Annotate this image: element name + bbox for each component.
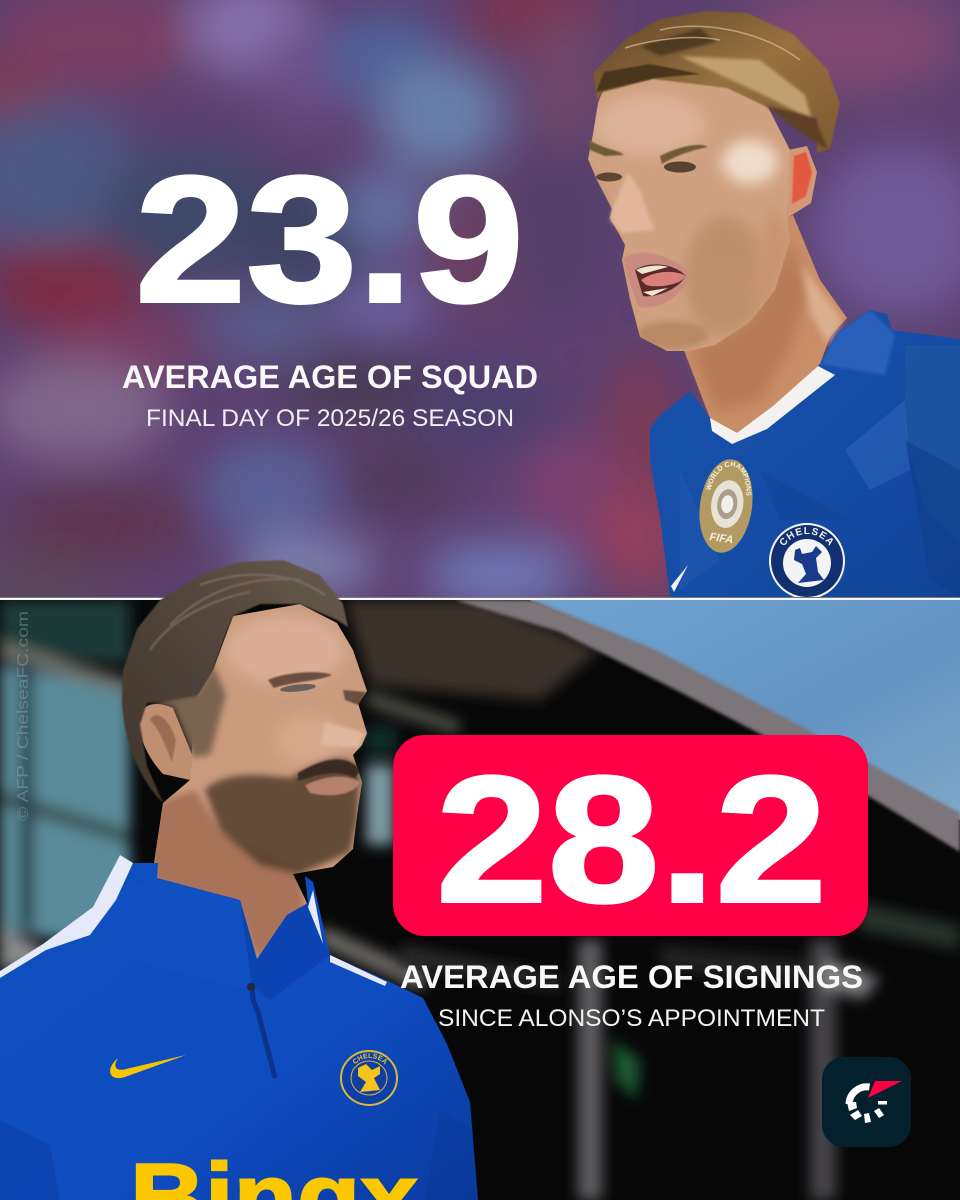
sky: [525, 598, 960, 820]
hair: [122, 560, 348, 803]
hair: [593, 11, 840, 153]
nike swoosh: [671, 565, 688, 592]
roof beam: [455, 600, 960, 852]
training jacket: [0, 850, 480, 1200]
big number: 23.9: 23.9: [135, 140, 524, 340]
chelsea crest: [340, 1050, 398, 1106]
jersey: [640, 300, 960, 600]
world champions badge: WORLD CHAMPIONS: [706, 461, 752, 496]
beard: [205, 759, 360, 874]
icon: app logo: [822, 1057, 911, 1147]
subheading: since appointment: SINCE ALONSO’S APPOINTMENT: [438, 1005, 825, 1032]
heading: average age of signings: AVERAGE AGE OF SIGNINGS: [400, 959, 863, 995]
hair fade at temple: [147, 665, 226, 757]
chelsea crest: CHELSEA: [780, 527, 833, 546]
nike swoosh: [110, 1055, 186, 1078]
zip: [252, 985, 275, 1078]
face and neck: [154, 604, 367, 959]
brows and eyes: [268, 672, 332, 688]
panel divider line: [0, 598, 960, 600]
building background: [0, 598, 960, 1200]
ear: [787, 146, 817, 218]
chelsea crest: CHELSEA: [352, 1053, 387, 1064]
panel: top, squad average age: [0, 0, 960, 597]
jersey collar: [710, 366, 835, 444]
photo credit: © AFP / ChelseaFC.com: [15, 611, 32, 821]
face: [588, 78, 790, 351]
chelsea crest: [769, 523, 845, 597]
subheading: final day of season: FINAL DAY OF 2025/26 SEASON: [146, 405, 514, 432]
big number: 28.2: 28.2: [436, 740, 827, 940]
world champions badge: FIFA: [709, 531, 734, 546]
jacket shoulder stripes: [0, 855, 133, 978]
panel: bottom, signings average age: [0, 559, 960, 1200]
neck: [680, 215, 847, 444]
mouth: [623, 253, 690, 307]
heading: average age of squad: AVERAGE AGE OF SQUAD: [122, 359, 538, 395]
ear: [138, 704, 193, 780]
player: Jordan Henderson: [0, 559, 478, 1200]
blurred stadium crowd background: [0, 0, 960, 615]
world champions badge: [699, 459, 753, 553]
player: Cole Palmer: [588, 10, 960, 597]
callout: 28.2: [393, 735, 868, 940]
brows and eyes: [589, 140, 708, 164]
